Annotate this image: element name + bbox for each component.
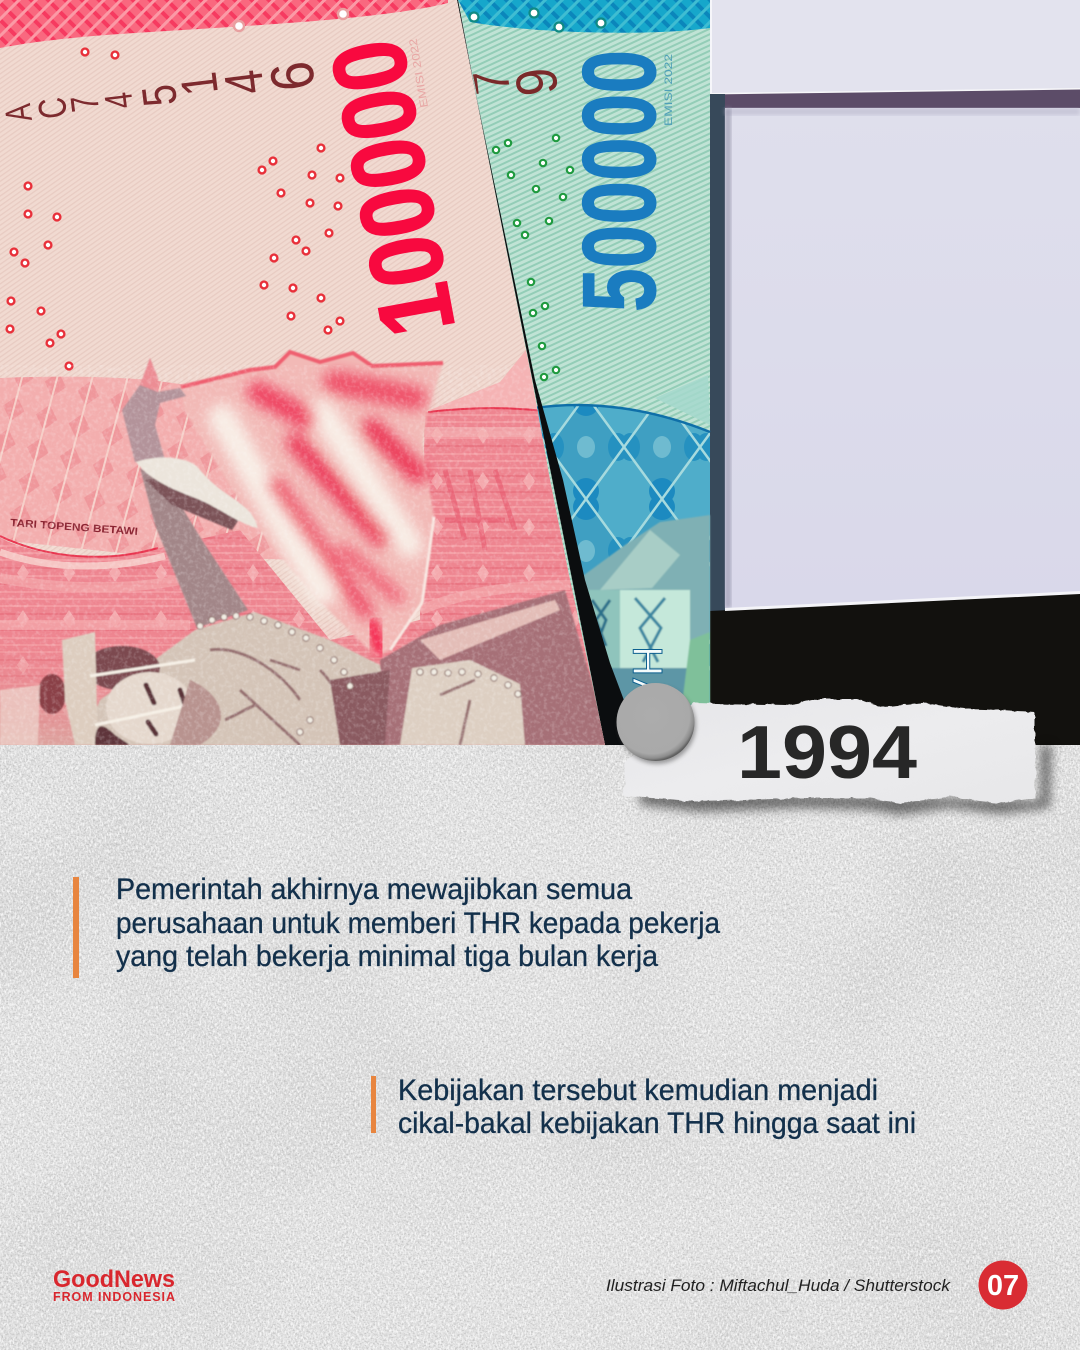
white sleeve [136,457,258,528]
green dots [470,8,606,380]
panel: blue 50000 banknote [458,0,710,745]
panel: red 100000 banknote: EMISI 2022 [408,37,431,108]
serial digits on blue note: 7 [462,67,522,98]
body [80,612,390,745]
photo credit: Ilustrasi Foto : Miftachul_Huda / Shutterstock [606,1276,952,1295]
grain over lower note [0,365,610,745]
panel: red 100000 banknote [0,0,610,745]
text block: second paragraph [371,1074,916,1140]
scarf [181,352,443,657]
page number badge [978,1260,1028,1310]
serial number: 1 [169,69,229,99]
text block: second paragraph: Kebijakan tersebut kemudian menjadi [398,1074,878,1107]
batik arch [535,405,710,705]
illustration: dancer [0,358,610,745]
serial digits on blue note: 9 [503,64,571,99]
year: 1994 [737,710,917,794]
dark sleeve band [145,476,240,530]
serial number: 4 [97,90,142,111]
house [580,515,710,705]
panel: blue 50000 banknote: HA [624,646,671,706]
serial number: 7 [63,93,108,114]
serial number: 5 [133,81,188,109]
shadow between notes [457,0,640,745]
page number badge: 07 [987,1270,1019,1302]
text block: first paragraph: Pemerintah akhirnya mewajibkan semua [116,873,632,906]
text block: first paragraph: perusahaan untuk memberi THR kepada pekerja [116,907,720,940]
head [94,645,161,690]
lower woven field [0,409,610,745]
red dots [7,9,348,369]
caption: Tari Topeng Betawi: TARI TOPENG BETAWI [10,517,138,538]
serial digits on blue note [472,70,558,94]
serial number: 4 [214,67,276,98]
arm [140,468,248,628]
text block: second paragraph: cikal-bakal kebijakan THR hingga saat ini [398,1107,916,1140]
logo: GoodNews from Indonesia: FROM INDONESIA [53,1290,175,1304]
text block: first paragraph: yang telah bekerja minimal tiga bulan kerja [116,940,658,973]
serial number: 6 [257,58,328,95]
fan motif [0,377,300,560]
torn paper label: 1994 [623,699,1052,815]
serial number: C [31,95,76,121]
hand and forearm [122,384,186,462]
pin [616,683,696,764]
panel: white sheet behind the notes [708,0,1080,745]
photo: banknotes and frame [0,0,1080,745]
text block: first paragraph [73,873,720,978]
logo: GoodNews from Indonesia: GoodNews [53,1266,175,1293]
serial number [0,58,328,124]
logo: GoodNews from Indonesia [53,1266,175,1304]
panel: blue 50000 banknote: EMISI 2022 [663,54,675,126]
